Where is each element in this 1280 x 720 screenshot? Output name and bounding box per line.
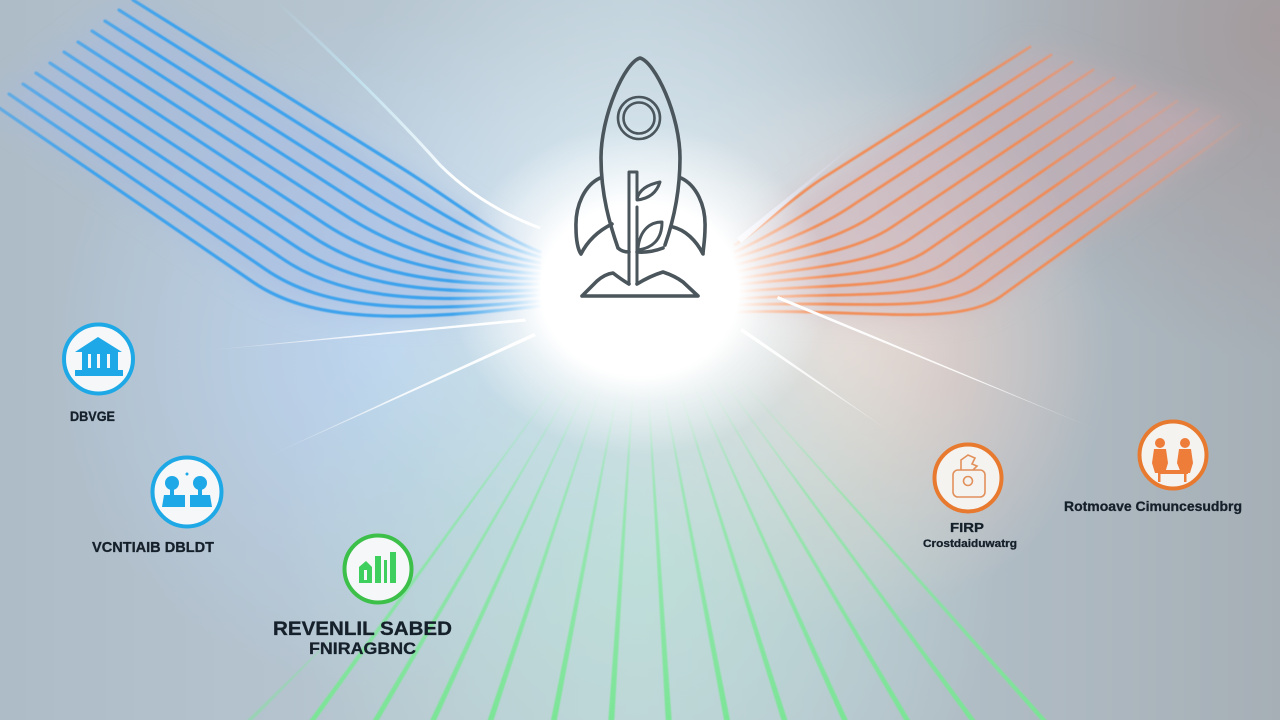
item: crowdfunding: Crostdaiduwatrg [923, 538, 1017, 550]
central glow [400, 90, 880, 490]
item: venture debt [92, 458, 222, 556]
white light rays [190, 0, 1105, 460]
label: VCNTIAIB DBLDT [92, 539, 214, 556]
item: rewards crowdfunding [1064, 422, 1242, 514]
icon: bank [64, 324, 133, 394]
orange flow lines [735, 47, 1240, 315]
left fin [576, 178, 612, 254]
item: revenue based financing: FNIRAGBNC [309, 639, 416, 658]
icon: two investors [152, 458, 222, 526]
porthole [618, 97, 660, 139]
item: crowdfunding [923, 444, 1017, 550]
right fin [673, 178, 705, 254]
rocket body [601, 58, 680, 252]
label: REVENLIL SABED [273, 619, 452, 640]
ground mound [582, 272, 698, 296]
blue flow lines [0, 0, 540, 316]
icon: two people at table [1140, 422, 1206, 488]
label: Rotmoave Cimuncesudbrg [1064, 498, 1242, 514]
plant stem [629, 172, 637, 283]
upper leaf [637, 182, 660, 200]
label: DBVGE [70, 408, 115, 424]
item: debt [64, 324, 133, 424]
icon: bar chart [344, 536, 412, 602]
label: FIRP [950, 520, 984, 535]
icon: rocket with sprout [576, 58, 705, 296]
icon: safe [934, 444, 1002, 512]
lower leaf [638, 222, 662, 250]
item: revenue based financing [273, 536, 452, 658]
green flow lines [242, 380, 1051, 720]
